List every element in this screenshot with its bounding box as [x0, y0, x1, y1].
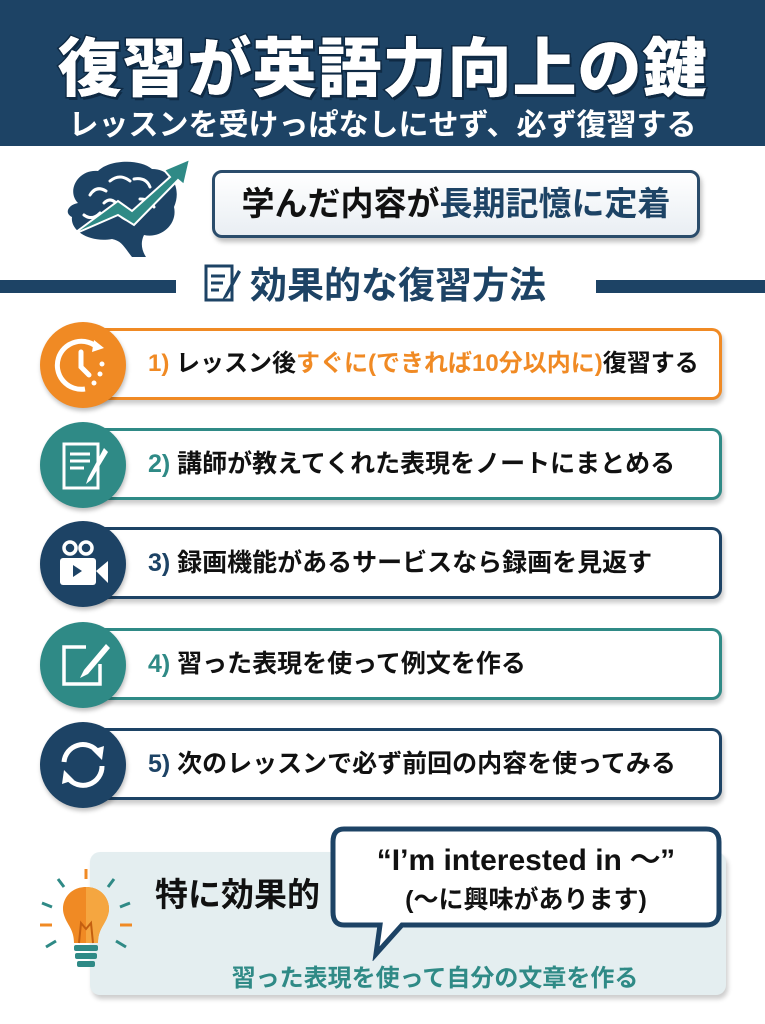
- item 3: 3) 録画機能があるサービスなら録画を見返す: [148, 549, 652, 577]
- icon: video camera: [40, 521, 126, 607]
- icon: notebook: [40, 422, 126, 508]
- item 2: 2) 講師が教えてくれた表現をノートにまとめる: [148, 450, 675, 478]
- item 5: 5) 次のレッスンで必ず前回の内容を使ってみる: [148, 750, 676, 778]
- key message box: 学んだ内容が長期記憶に定着: [242, 185, 670, 222]
- section heading: 効果的な復習方法: [250, 265, 546, 306]
- subtitle: レッスンを受けっぱなしにせず、必ず復習する: [69, 109, 696, 142]
- item 2: [38, 422, 726, 514]
- header band: [0, 0, 765, 146]
- key message box: [212, 170, 700, 238]
- item 1: 1) レッスン後すぐに(できれば10分以内に)復習する: [148, 350, 699, 377]
- icon: brain with arrow: [68, 160, 188, 257]
- icon: refresh: [40, 722, 126, 808]
- section bar right: [596, 280, 765, 293]
- speech bubble: (～に興味があります): [405, 885, 647, 914]
- speech bubble: “I’m interested in ～”: [377, 844, 675, 877]
- icon: edit: [40, 622, 126, 708]
- bottom panel: [90, 852, 726, 995]
- title: 復習が英語力向上の鍵: [58, 33, 708, 105]
- item 4: [38, 622, 726, 714]
- section bar left: [0, 280, 176, 293]
- item 4: 4) 習った表現を使って例文を作る: [148, 650, 526, 678]
- icon: clock: [40, 322, 126, 408]
- bottom note: 習った表現を使って自分の文章を作る: [232, 965, 638, 992]
- item 3: [38, 521, 726, 612]
- speech bubble: [330, 826, 722, 961]
- label: especially effective: 特に効果的: [155, 876, 320, 913]
- item 5: [38, 722, 726, 814]
- item 1: [38, 322, 726, 414]
- icon: light bulb: [40, 869, 132, 967]
